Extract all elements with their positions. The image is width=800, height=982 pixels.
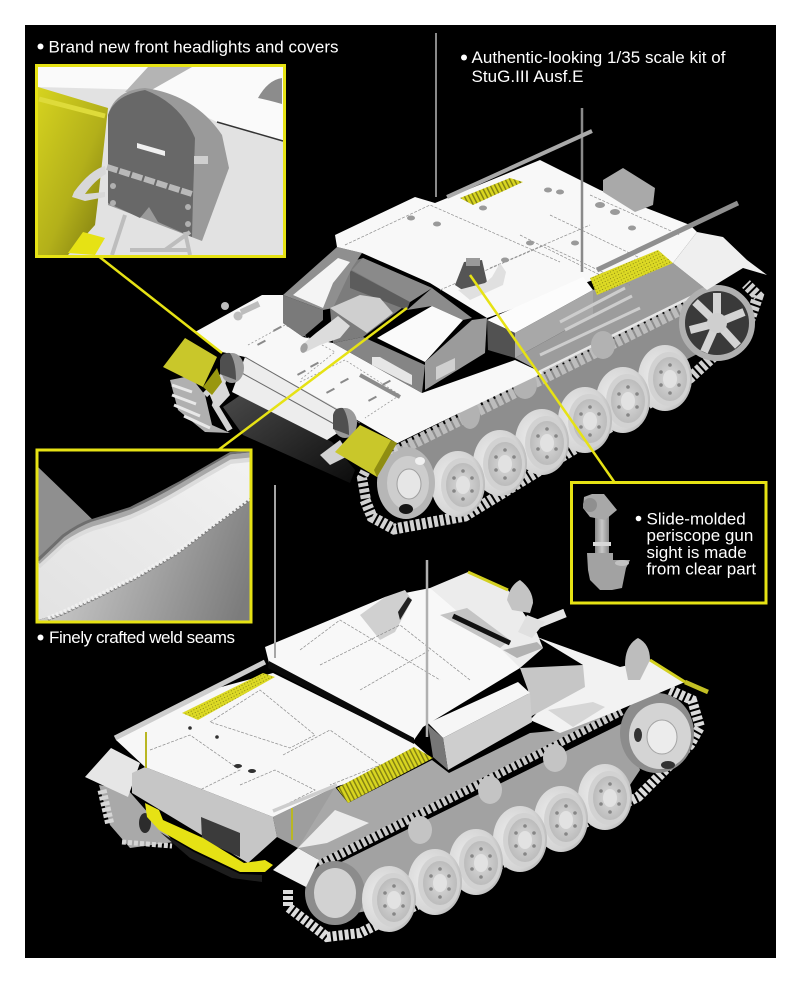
- caption: periscope gun: [646, 526, 753, 545]
- superstructure side: [425, 318, 487, 390]
- rear hull face: [132, 767, 277, 863]
- bright plate: [38, 451, 250, 620]
- lower tank: 3/4 rear view: [85, 485, 708, 937]
- cover side: [108, 88, 229, 241]
- callout line: weld seams: [217, 308, 407, 451]
- gun: [299, 295, 393, 354]
- handle: [72, 166, 106, 201]
- caption: from clear part: [646, 560, 756, 579]
- yellow posts: [146, 732, 292, 840]
- dark slot between roof and deck: [268, 661, 414, 744]
- gun: [518, 613, 565, 638]
- hatch details: [257, 326, 391, 402]
- side hatch: [436, 358, 455, 380]
- sprocket track: [362, 446, 396, 500]
- slit: [453, 616, 510, 643]
- superstructure side plate: [520, 665, 585, 717]
- rail right: [273, 785, 337, 811]
- return rollers: [408, 744, 567, 844]
- roof panel lines: [345, 195, 680, 290]
- mesh screen right: [590, 250, 673, 295]
- rail: [125, 67, 192, 92]
- yellow plate: [38, 87, 108, 255]
- rail left: [115, 662, 265, 738]
- hull side: [325, 722, 640, 915]
- inner wall: [350, 270, 410, 310]
- deck panel lines: [248, 325, 400, 418]
- black upper area: [38, 451, 250, 519]
- lower hull shadow: [223, 392, 355, 483]
- slit plate: [440, 608, 510, 648]
- fender right deck: [530, 637, 685, 733]
- bar stowage: [360, 375, 400, 397]
- front face: [333, 337, 425, 393]
- antenna left: [435, 33, 437, 197]
- roof: [265, 588, 520, 740]
- rear deck details: [188, 726, 256, 773]
- roof: [335, 160, 697, 318]
- road wheels: [362, 764, 632, 932]
- engine side tools: [540, 288, 640, 355]
- callout line: headlights: [97, 255, 222, 353]
- rear shadow below guard: [160, 832, 262, 882]
- caption: headlights: Brand new front headlights and covers: [48, 38, 338, 56]
- hinge strip: [107, 167, 192, 194]
- rear right track: [288, 690, 700, 937]
- caption: scale kit: [461, 48, 726, 86]
- yellow flap right: [650, 660, 708, 692]
- under plate: [38, 498, 250, 622]
- side plate: [377, 306, 463, 362]
- rear deck hatch lines: [150, 690, 380, 810]
- sponson end: [428, 725, 448, 770]
- commander cupola opening: [455, 258, 506, 300]
- black rear plate: [201, 817, 240, 857]
- front plate: [232, 357, 357, 440]
- upper deck: [38, 67, 283, 141]
- mesh left: [182, 673, 275, 720]
- antenna right: [581, 108, 583, 272]
- left block white top: [293, 258, 350, 308]
- rear stowage box: [603, 168, 655, 212]
- inset: headlight cover: [36, 66, 285, 256]
- frame: [36, 66, 284, 256]
- weld bead: [48, 500, 250, 620]
- hull side: [397, 292, 725, 490]
- antenna left: [274, 485, 276, 658]
- mesh right: [337, 747, 433, 803]
- yellow flap right: [335, 425, 397, 477]
- inset: weld seam: [37, 450, 251, 622]
- headlight left: [507, 580, 533, 613]
- right wall top: [407, 288, 472, 320]
- icon: periscope gun sight: [583, 494, 630, 590]
- plate lines: [240, 357, 360, 430]
- dome on deck: [258, 78, 282, 104]
- headlight right: [320, 408, 357, 465]
- headlight left: [206, 353, 244, 410]
- fender strip: [673, 232, 767, 290]
- frame: [37, 450, 251, 622]
- caption: sight is made: [646, 543, 747, 562]
- idler wheel: [682, 288, 752, 358]
- mesh screen left: [460, 178, 523, 205]
- drive sprocket: [377, 447, 435, 519]
- caption: scale kit: StuG.III Ausf.E: [472, 67, 584, 86]
- roof panel lines: [300, 620, 470, 690]
- right fender: [273, 848, 319, 887]
- small fittings on hull: [221, 301, 260, 320]
- rivets: [110, 183, 191, 227]
- roof hatch knobs: [407, 188, 636, 262]
- front left track: [170, 372, 230, 433]
- deck edge: [217, 122, 283, 141]
- side engine area: [298, 708, 621, 860]
- caption: weld seams: Finely crafted weld seams: [49, 628, 235, 647]
- yellow tab: [68, 232, 105, 255]
- gray wedge: [503, 642, 543, 658]
- bullet: [636, 516, 641, 521]
- idler: [305, 861, 365, 925]
- front deck: [195, 295, 543, 443]
- rear left track: [99, 785, 174, 848]
- hinge on yellow plate: [39, 99, 105, 116]
- sprocket: [620, 693, 694, 773]
- rear side fill: [273, 787, 348, 848]
- gray strut: [38, 467, 92, 558]
- front deck forward of gun: [430, 572, 543, 668]
- rail right: [597, 203, 738, 270]
- curved ridge: [38, 451, 250, 566]
- rear right white deck: [298, 810, 369, 848]
- stowage box: [548, 702, 605, 727]
- front stowage box: [372, 357, 412, 385]
- yellow flap top: [468, 572, 508, 590]
- left block outer wall: [283, 247, 362, 310]
- yellow rear guard: [145, 803, 273, 872]
- upper tank: 3/4 front view: [163, 33, 767, 529]
- caption: Slide-molded: [646, 510, 746, 528]
- yellow flap left: [163, 338, 217, 387]
- legs: [112, 215, 190, 255]
- inset: periscope: [572, 482, 766, 603]
- antenna right: [426, 560, 428, 737]
- rail left: [447, 131, 592, 197]
- rear deck: [116, 673, 431, 817]
- lower track run: [365, 284, 758, 529]
- left block front: [283, 295, 323, 337]
- sponson box: [487, 277, 593, 358]
- caption: scale kit: Authentic-looking 1/35 scale kit of: [472, 48, 726, 67]
- latch: [194, 156, 208, 164]
- callout line: periscope: [470, 275, 615, 483]
- inner detail: [352, 258, 432, 302]
- well interior: [330, 258, 432, 343]
- left fender: [85, 748, 140, 797]
- headlight right: [625, 638, 650, 680]
- slit: [137, 143, 165, 156]
- sponson side: [443, 693, 532, 770]
- road wheels: [431, 345, 692, 517]
- cupola area: [360, 590, 412, 640]
- engine side gear area: [515, 263, 707, 373]
- cover face: [108, 90, 195, 237]
- sponson top: [428, 682, 530, 738]
- return rollers: [460, 331, 615, 429]
